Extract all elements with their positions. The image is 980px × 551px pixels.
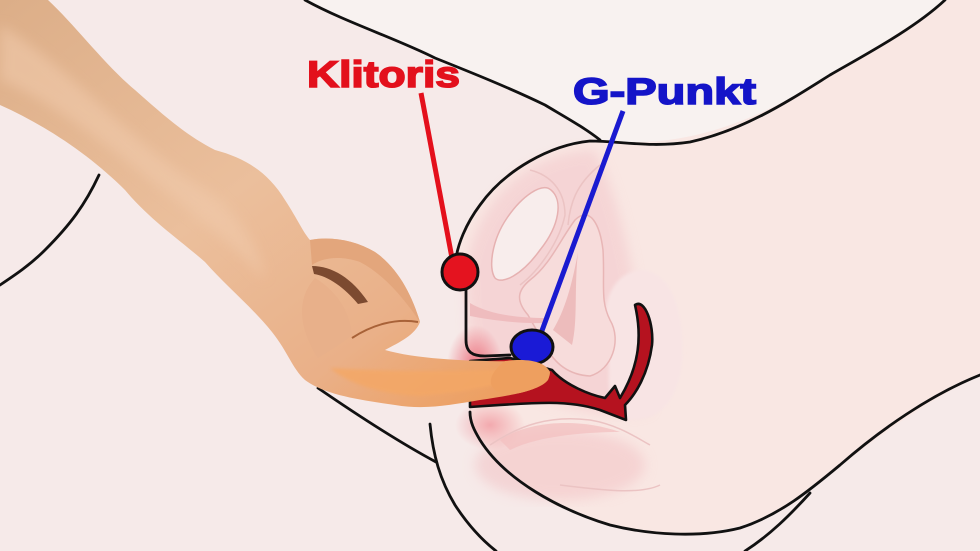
flush near contact (447, 325, 503, 405)
label line: Klitoris (421, 93, 452, 258)
label: Klitoris: Klitoris (307, 54, 460, 95)
organ: oval pubic bone (492, 188, 558, 280)
thumb crease (352, 321, 418, 338)
organ: bladder outline (520, 215, 615, 376)
marker: Klitoris (442, 254, 478, 290)
panel: body cross-section (447, 0, 980, 533)
organ: red vaginal canal and uterus (470, 304, 652, 420)
upper background area (305, 0, 945, 142)
organ: urethra band (470, 303, 545, 323)
finger gap (312, 266, 368, 304)
icon: hand and arm (0, 0, 549, 407)
curled fingers (310, 238, 420, 322)
label: G-Punkt: G-Punkt (573, 71, 756, 112)
marker: G-Punkt (511, 330, 553, 364)
knuckle fold (302, 278, 352, 358)
label line: G-Punkt (540, 111, 623, 336)
fingertip over marker (491, 360, 550, 394)
lower tint (475, 430, 645, 500)
organ: pale bladder area (605, 270, 682, 420)
extended finger highlight (330, 368, 535, 396)
organ: inner folds (553, 252, 578, 345)
pelvic tint (466, 150, 650, 414)
organ: lower canal (500, 423, 620, 450)
arm shading (0, 25, 265, 280)
organ: faint contour lines (490, 165, 660, 491)
